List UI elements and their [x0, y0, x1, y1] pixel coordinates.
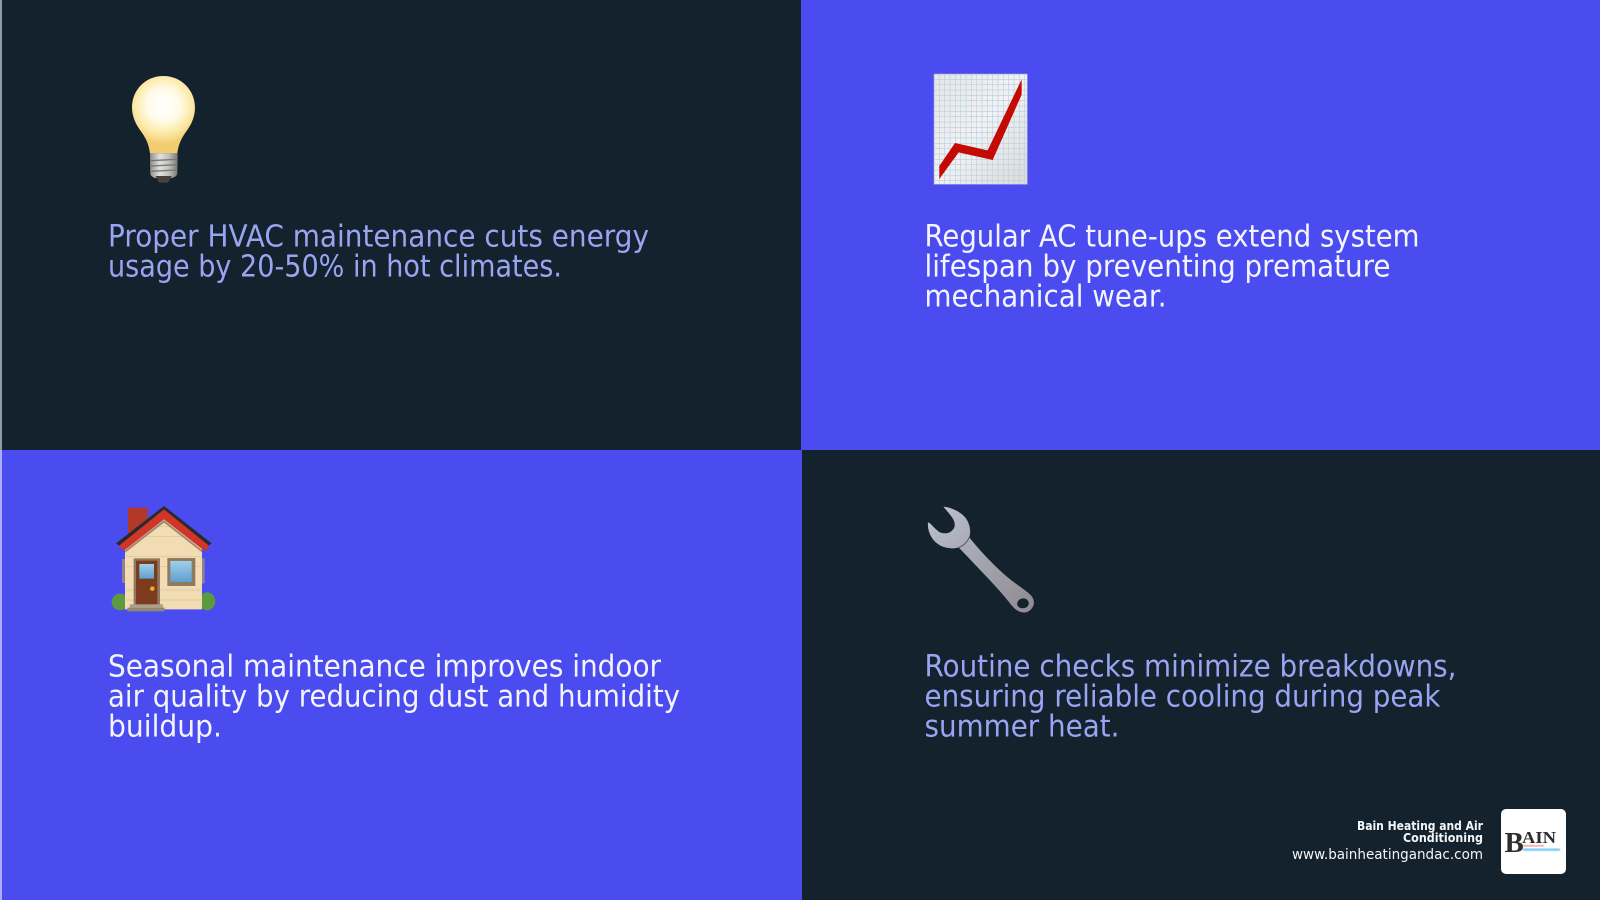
- icon: light bulb: [132, 76, 195, 183]
- logo: Bain badge: B: [1504, 827, 1524, 859]
- footer: company name and website: [1292, 818, 1484, 863]
- panel: system lifespan: [801, 0, 1600, 450]
- text: energy usage: Proper HVAC maintenance cuts energy: [108, 220, 649, 254]
- text: lifespan: mechanical wear.: [924, 280, 1166, 314]
- panel: air quality: [0, 450, 802, 900]
- text: lifespan: Regular AC tune-ups extend system: [924, 220, 1420, 254]
- footer: company name and website: Bain Heating and Air: [1357, 818, 1484, 833]
- text: reliability: ensuring reliable cooling during peak: [924, 680, 1441, 714]
- panel: energy savings: [0, 0, 801, 450]
- icon: wrench: [928, 507, 1034, 612]
- text: indoor air: buildup.: [108, 710, 222, 744]
- icon: chart increasing: [934, 74, 1027, 184]
- text: indoor air: [108, 650, 680, 744]
- panel: reliability: [802, 450, 1600, 900]
- text: reliability: summer heat.: [924, 710, 1120, 744]
- text: reliability: Routine checks minimize breakdowns,: [924, 650, 1456, 684]
- footer: company name and website: www.bainheatingandac.com: [1292, 847, 1483, 863]
- logo: Bain badge: [1501, 809, 1566, 874]
- text: lifespan: [924, 220, 1420, 314]
- text: energy usage: usage by 20-50% in hot climates.: [108, 250, 562, 284]
- icon: house: [112, 506, 215, 611]
- text: energy usage: [108, 220, 649, 284]
- text: reliability: [924, 650, 1456, 744]
- footer: company name and website: Conditioning: [1403, 830, 1483, 845]
- text: indoor air: Seasonal maintenance improves indoor: [108, 650, 662, 684]
- text: indoor air: air quality by reducing dust and humidity: [108, 680, 680, 714]
- text: lifespan: lifespan by preventing premature: [924, 250, 1390, 284]
- logo: Bain badge: AIN: [1522, 828, 1557, 847]
